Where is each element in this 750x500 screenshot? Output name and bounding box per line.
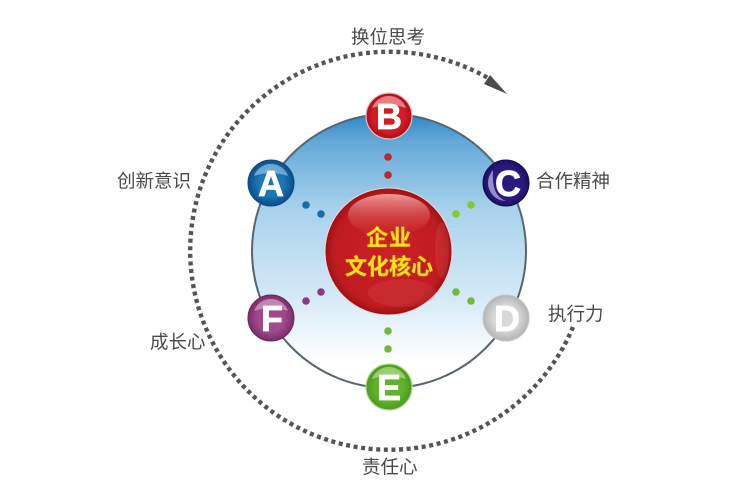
label: growth: 成长心 (150, 332, 206, 352)
connector dots: E (384, 327, 392, 353)
ball C: C (495, 163, 521, 204)
label: cooperation: 合作精神 (536, 170, 610, 192)
central red sphere (325, 188, 452, 315)
connector dots: C (452, 201, 475, 218)
panel: blue gradient disc (252, 114, 526, 388)
label: responsibility: 责任心 (362, 456, 418, 478)
ball B (366, 93, 412, 139)
core text line one: 企业 (366, 226, 412, 250)
label: top: 换位思考 (351, 26, 425, 48)
ball A (248, 160, 294, 206)
ball B: B (376, 96, 402, 137)
core text line two: 文化核心 (345, 254, 433, 280)
label: innovation: 创新意识 (117, 170, 191, 192)
ball E: E (377, 367, 401, 408)
ball E (366, 364, 412, 410)
connector dots: A (302, 201, 325, 218)
label: execution: 执行力 (548, 304, 604, 324)
connector dots: B (384, 153, 392, 179)
arrow head (484, 75, 507, 94)
ball A: A (258, 163, 284, 204)
ball C (483, 160, 529, 206)
dotted circular arc (190, 52, 573, 450)
connector dots: D (452, 288, 475, 305)
ball D: D (494, 298, 520, 339)
ball D (483, 295, 529, 341)
ball F: F (261, 298, 283, 339)
ball F (248, 295, 294, 341)
connector dots: F (302, 288, 325, 305)
